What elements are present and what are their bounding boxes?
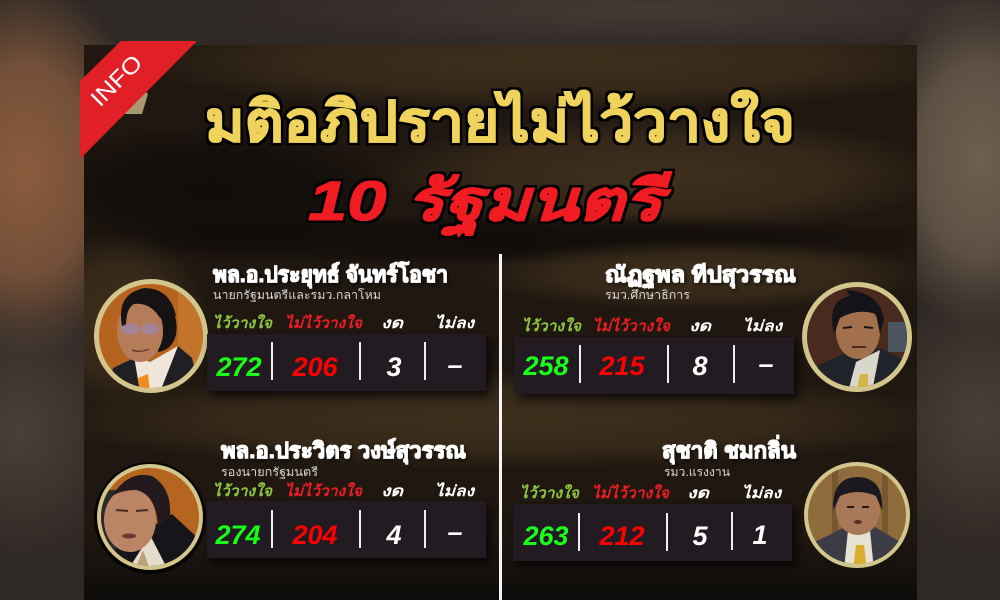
dark background panel: [84, 45, 917, 600]
vote labels: ไว้วางใจ: [213, 482, 273, 500]
vote labels: ไม่ลง: [743, 317, 784, 335]
panel: Suchart: [513, 434, 910, 570]
vote bar: 1: [752, 520, 768, 550]
title line 1: มติอภิปรายไม่ไว้วางใจ: [205, 89, 795, 153]
vote bar: –: [447, 517, 463, 547]
logo behind ribbon: [124, 92, 148, 114]
vote bar: 274: [214, 520, 261, 550]
vote bar: 263: [522, 521, 569, 551]
name: พล.อ.ประวิตร วงษ์สุวรรณ: [221, 438, 466, 465]
name: ณัฏฐพล ทีปสุวรรณ: [605, 262, 796, 289]
vote bar: 212: [598, 521, 645, 551]
vote labels: ไม่ลง: [435, 314, 476, 332]
portrait: [802, 282, 912, 392]
vote bar: 5: [692, 521, 708, 551]
vote bar: 258: [522, 351, 569, 381]
vote labels: งด: [381, 483, 405, 500]
vote bar: 215: [598, 351, 646, 381]
vote bar: 4: [385, 520, 402, 550]
vote labels: ไม่ไว้วางใจ: [285, 482, 363, 500]
vote labels: [213, 314, 476, 332]
portrait: [804, 462, 910, 570]
portrait: [94, 462, 206, 574]
portrait: [94, 279, 208, 393]
panel: Prayut: [94, 261, 486, 393]
vote labels: [213, 482, 476, 500]
subtitle: 10 ministers: 10 รัฐมนตรี: [308, 169, 672, 237]
vote bar: 8: [692, 351, 708, 381]
role: รมว.ศึกษาธิการ: [605, 288, 691, 302]
role: รมว.แรงงาน: [664, 465, 730, 479]
vote labels: [522, 317, 784, 335]
name: พล.อ.ประยุทธ์ จันทร์โอชา: [213, 261, 448, 289]
panel: Prawit: [94, 438, 486, 574]
vote bar: [207, 334, 486, 391]
vote labels: งด: [687, 485, 711, 502]
vote bar: [207, 501, 486, 558]
vote labels: ไม่ไว้วางใจ: [592, 484, 670, 502]
role: นายกรัฐมนตรีและรมว.กลาโหม: [213, 288, 381, 302]
panel: Nataphol: [515, 262, 912, 394]
vote labels: ไม่ลง: [435, 482, 476, 500]
vote bar: 3: [386, 352, 402, 382]
ribbon: INFO: [80, 41, 197, 159]
vote bar: [515, 337, 794, 394]
vote labels: ไม่ลง: [742, 484, 783, 502]
vote labels: ไม่ไว้วางใจ: [285, 314, 363, 332]
vote labels: ไว้วางใจ: [522, 317, 582, 335]
name: สุชาติ ชมกลิ่น: [662, 434, 796, 465]
vote labels: งด: [689, 318, 713, 335]
vote bar: 206: [291, 352, 339, 382]
vote labels: งด: [381, 315, 405, 332]
role: รองนายกรัฐมนตรี: [221, 465, 319, 479]
vote bar: 272: [215, 352, 262, 382]
centre divider: [499, 254, 502, 600]
vote bar: –: [758, 349, 774, 379]
vote labels: ไม่ไว้วางใจ: [593, 317, 671, 335]
vote labels: ไว้วางใจ: [520, 484, 580, 502]
vote labels: ไว้วางใจ: [213, 314, 273, 332]
vote labels: [520, 484, 783, 502]
ribbon: INFO: INFO: [85, 49, 147, 112]
vote bar: –: [447, 350, 463, 380]
vote bar: [513, 504, 792, 561]
vote bar: 204: [291, 520, 338, 550]
